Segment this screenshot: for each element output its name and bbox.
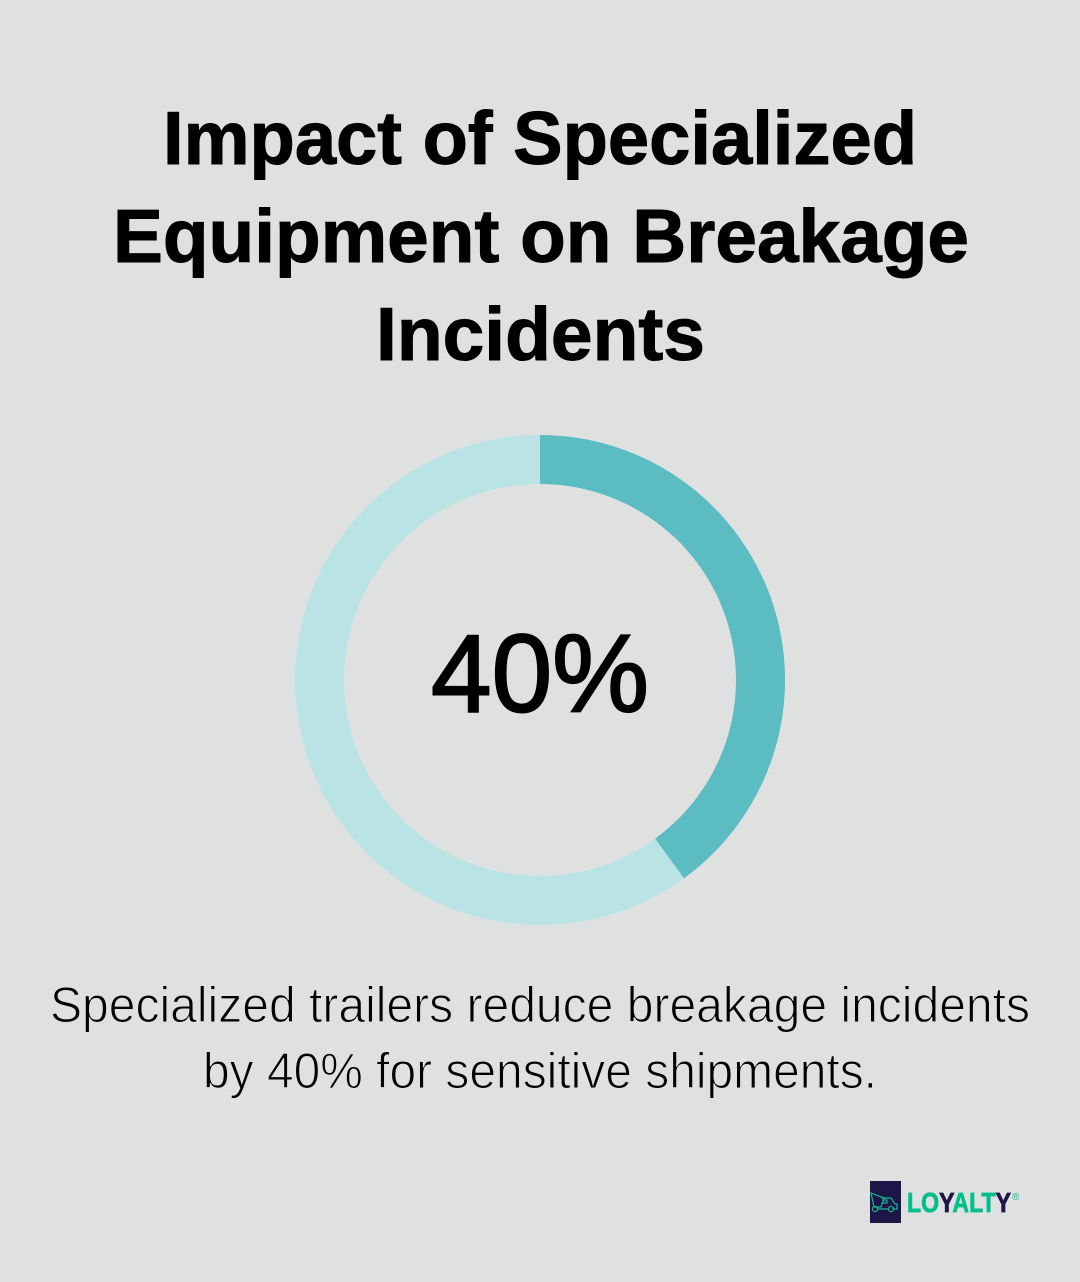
logo wordmark: LOYALTY [907, 1187, 1011, 1218]
donut value label: 40% [431, 612, 649, 736]
description text: Specialized trailers reduce breakage incidents [50, 977, 1030, 1033]
donut chart: 40% [320, 460, 761, 900]
title: Equipment on Breakage [113, 194, 969, 278]
title [113, 96, 969, 376]
donut value arc [540, 460, 761, 858]
donut track [320, 460, 760, 900]
logo: Loyalty [870, 1181, 1020, 1223]
title: Incidents [376, 292, 705, 376]
description text: by 40% for sensitive shipments. [203, 1043, 877, 1099]
description text [50, 977, 1030, 1099]
logo icon: truck on navy square [870, 1181, 901, 1223]
title: Impact of Specialized [163, 96, 917, 180]
logo registered mark: ® [1012, 1192, 1020, 1203]
